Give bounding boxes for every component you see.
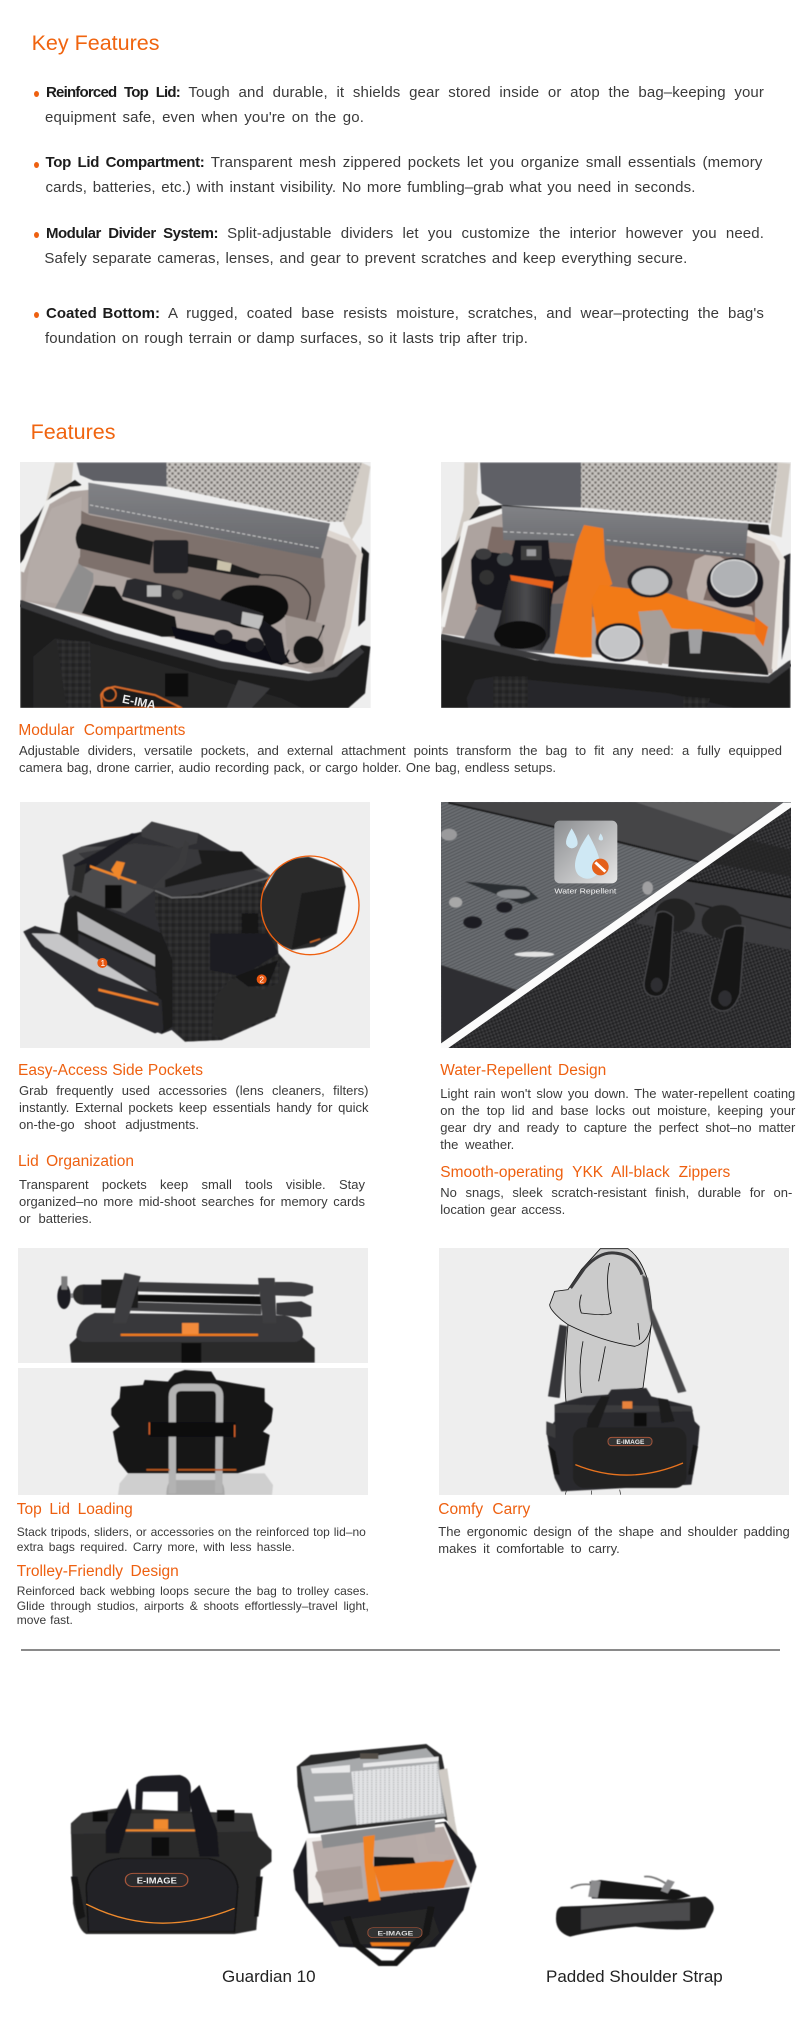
bullet item: Coated Bottom: Coated Bottom: [46,305,160,322]
bullet item: Top Lid Compartment: cards, batteries, etc.) with instant visibility. No more fumbling–grab what you need in seconds. [46,179,696,196]
photo: water repellent fabric and YKK zippers [441,802,791,1048]
description [19,1177,365,1226]
description [440,1185,792,1217]
product photo: padded shoulder strap [555,1875,714,1938]
description [19,1083,368,1132]
description [19,743,782,775]
photo: side pockets of bag with magnified circle [20,802,370,1048]
photo: side pockets of bag with magnified circle: 2 [259,974,264,984]
description [440,1086,796,1152]
text block: Modular Compartments [18,722,782,775]
bullet item: Coated Bottom: A rugged, coated base resists moisture, scratches, and wear–protecting the bag's [168,305,764,322]
heading: Top Lid Loading [17,1501,133,1518]
description: The ergonomic design of the shape and shoulder padding [438,1524,790,1539]
description: gear dry and ready to capture the perfect shot–no matter [440,1120,795,1135]
heading: Features: Features [31,420,115,444]
heading: Lid Organization [18,1153,134,1170]
description: extra bags required. Carry more, with less hassle. [17,1540,295,1554]
heading: Comfy Carry [438,1501,530,1518]
bullet item: Top Lid Compartment: Top Lid Compartment: [46,154,204,171]
description: camera bag, drone carrier, audio recording pack, or cargo holder. One bag, endless setups. [19,760,556,775]
photo: camera and lenses with orange dividers [441,462,791,708]
photo: camcorder kit inside open bag [20,462,371,708]
product photo: Guardian 10 bag closed and open [70,1743,478,1967]
text column: top lid loading and trolley design [17,1501,369,1627]
description [438,1524,790,1556]
text column: comfy carry [438,1501,790,1556]
description: Light rain won't slow you down. The water-repellent coating [440,1086,795,1101]
description: on-the-go shoot adjustments. [19,1117,199,1132]
photo: tripod strapped on top lid [18,1248,368,1363]
bullet item: Modular Divider System: Modular Divider System: [46,225,218,242]
description: location gear access. [440,1202,565,1217]
photo: water repellent fabric and YKK zippers: Water Repellent [554,887,616,896]
bullet item: Modular Divider System [34,225,764,267]
description: Reinforced back webbing loops secure the bag to trolley cases. [17,1584,369,1598]
description: Adjustable dividers, versatile pockets, and external attachment points transform the bag to fit any need: a fully equipped [19,743,782,758]
bullet item: Reinforced Top Lid [34,84,764,126]
description: or batteries. [19,1211,92,1226]
photo: side pockets of bag with magnified circle: 1 [100,958,105,968]
product photo: Guardian 10 bag closed and open: E-IMAGE [137,1876,177,1885]
heading: Water-Repellent Design [440,1062,606,1079]
description: the weather. [440,1137,514,1152]
bullet item: Reinforced Top Lid: equipment safe, even when you're on the go. [45,109,364,126]
bullet item: Reinforced Top Lid: Reinforced Top Lid: [46,84,180,101]
description: makes it comfortable to carry. [438,1541,620,1556]
text column: side pockets and lid organization [18,1062,368,1226]
description [17,1584,369,1627]
product photo: Guardian 10 bag closed and open: E-IMAGE [377,1930,413,1937]
bullet list: key features [34,84,764,347]
description: instantly. External pockets keep essentials handy for quick [19,1100,368,1115]
bullet item: Coated Bottom: foundation on rough terrain or damp surfaces, so it lasts trip after trip. [45,330,528,347]
description: Transparent pockets keep small tools visible. Stay [19,1177,365,1192]
description: on the top lid and base locks out moisture, keeping your [440,1103,795,1118]
title: Key Features: Key Features [32,31,159,55]
caption: Padded Shoulder Strap: Padded Shoulder Strap [546,1967,723,1986]
bullet item: Reinforced Top Lid: Tough and durable, it shields gear stored inside or atop the bag–keeping your [188,84,764,101]
heading: Trolley-Friendly Design [17,1563,179,1580]
heading: Easy-Access Side Pockets [18,1062,203,1079]
description: Glide through studios, airports & shoots effortlessly–travel light, [17,1598,369,1612]
caption: Guardian 10: Guardian 10 [222,1967,316,1986]
bullet item: Top Lid Compartment: Transparent mesh zippered pockets let you organize small essentials (memory [211,154,762,171]
bullet item: Modular Divider System: Split-adjustable dividers let you customize the interior however you need. [227,225,764,242]
description: Grab frequently used accessories (lens cleaners, filters) [19,1083,368,1098]
description: organized–no more mid-shoot searches for memory cards [19,1194,365,1209]
photo: bag mounted on trolley handle [18,1368,368,1495]
heading: Smooth-operating YKK All-black Zippers [440,1164,730,1181]
description: move fast. [17,1613,73,1627]
bullet item: Coated Bottom [34,305,764,347]
photo: person carrying bag by shoulder strap [439,1248,789,1495]
bullet item: Top Lid Compartment [34,154,762,196]
description: No snags, sleek scratch-resistant finish, durable for on- [440,1185,792,1200]
heading: Modular Compartments [18,722,185,739]
photo: person carrying bag by shoulder strap: E-IMAGE [617,1440,645,1446]
description [17,1525,366,1554]
description: Stack tripods, sliders, or accessories on the reinforced top lid–no [17,1525,366,1539]
text column: water repellent and zippers [440,1062,796,1217]
bullet item: Modular Divider System: Safely separate cameras, lenses, and gear to prevent scratches and keep everything secure. [44,250,687,267]
